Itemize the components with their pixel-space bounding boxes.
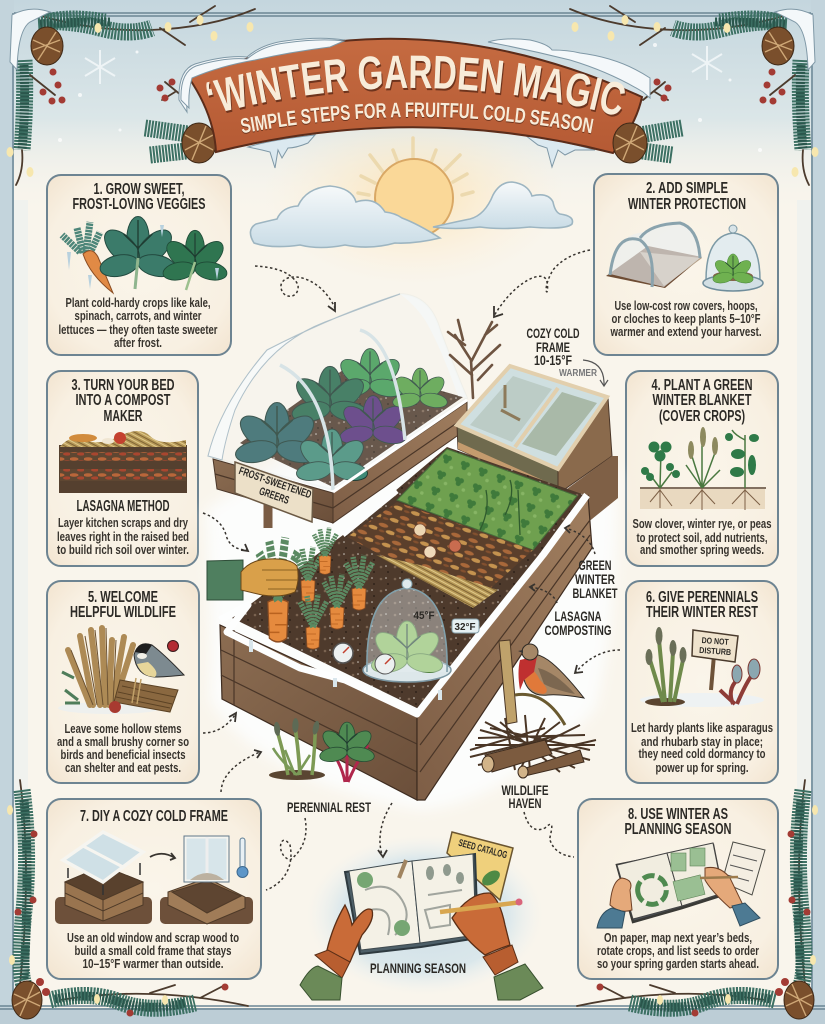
panel 7: cold frame	[47, 799, 261, 979]
icon: lasagna layers	[59, 431, 187, 493]
label: green winter blanket	[572, 557, 618, 601]
body 3: leaves right in the raised bed	[57, 530, 189, 544]
body 8: so your spring garden starts ahead.	[597, 957, 759, 971]
garland: top left corner	[6, 6, 255, 185]
body 3: to build rich soil over winter.	[57, 543, 189, 557]
planning vignette	[300, 832, 543, 1000]
label: lasagna composting: LASAGNA	[554, 608, 602, 624]
heading 4: WINTER BLANKET	[652, 392, 752, 409]
garland: bottom right corner	[577, 780, 818, 1019]
title text: ‘WINTER GARDEN MAGIC	[206, 56, 626, 117]
icon: clouds	[250, 182, 572, 248]
bird: robin	[515, 644, 584, 725]
icon: asparagus sign rhubarb: DISTURB	[699, 645, 732, 657]
label: cozy cold frame	[526, 325, 597, 379]
icon: soil thermometer	[333, 643, 353, 663]
cold frame	[457, 366, 618, 540]
icon: asparagus sign rhubarb	[640, 627, 764, 707]
heading 6: 6. GIVE PERENNIALS	[646, 589, 758, 606]
arrow: bed to planning	[378, 803, 392, 857]
garland: top right corner	[570, 6, 818, 185]
icon: carrot kale spinach	[62, 216, 228, 293]
icon: gloved hand pulling carrot	[207, 559, 298, 600]
icon: clover rye pea plants	[640, 427, 766, 510]
banner decoration: right pine and cone	[635, 78, 682, 155]
label: wildlife haven	[502, 782, 548, 811]
panel 4: cover crops	[626, 371, 778, 566]
row cover and hoops	[208, 294, 467, 490]
icon: sun	[358, 138, 473, 237]
icon: soil patches	[55, 897, 253, 924]
heading 2: 2. ADD SIMPLE	[646, 180, 728, 197]
body 4: Sow clover, winter rye, or peas	[632, 517, 772, 531]
panel 8: planning	[578, 799, 778, 979]
body 4: to protect soil, add nutrients,	[636, 531, 768, 545]
label: wildlife haven: WILDLIFE	[502, 782, 548, 798]
body 4: and smother spring weeds.	[640, 543, 764, 557]
arrow: blanket label to bed	[565, 525, 595, 554]
arrow: panel 1 to back bed	[255, 266, 335, 311]
body 5: can shelter and eat pests.	[65, 761, 181, 775]
sign: frost-sweetened greens: GREERS	[257, 485, 291, 507]
heading 8	[624, 806, 732, 838]
body 7: 10–15°F warmer than outside.	[82, 957, 224, 971]
arrow: panel 5 to perennials	[203, 713, 236, 733]
body 7: build a small cold frame that stays	[74, 944, 232, 958]
icon: thermometer	[237, 838, 248, 878]
sign: frost-sweetened greens	[235, 462, 313, 528]
heading 7: 7. DIY A COZY COLD FRAME	[80, 808, 228, 825]
body 2	[610, 299, 762, 339]
heading 2: WINTER PROTECTION	[628, 196, 746, 213]
arrow: lasagna label to bed	[530, 584, 557, 603]
seed catalog: SEED CATALOG	[457, 838, 508, 861]
main raised bed	[220, 447, 592, 800]
label: lasagna composting	[544, 608, 612, 638]
label: green winter blanket: GREEN	[578, 557, 612, 573]
arrow: frame step	[150, 853, 175, 860]
open book	[345, 854, 478, 954]
body 6: Let hardy plants like asparagus	[631, 721, 773, 735]
body 2: Use low-cost row covers, hoops,	[614, 299, 758, 313]
heading 3: MAKER	[104, 408, 142, 425]
right mitten and sleeve	[440, 893, 543, 1000]
body 3	[57, 516, 189, 557]
label: green winter blanket: BLANKET	[572, 585, 618, 601]
body 2: warmer and extend your harvest.	[610, 325, 762, 339]
heading 5	[70, 589, 176, 621]
heading 5: HELPFUL WILDLIFE	[70, 604, 176, 621]
icon: frame with window lifted	[63, 832, 143, 921]
icon: chard	[319, 722, 375, 782]
body 3: Layer kitchen scraps and dry	[58, 516, 188, 530]
heading 1: FROST-LOVING VEGGIES	[72, 196, 206, 213]
heading 1	[72, 181, 206, 213]
garland: bottom left corner	[7, 780, 248, 1019]
arrow: panel 8 loop	[524, 812, 574, 857]
icon: notepad	[722, 842, 765, 895]
body 1	[58, 296, 218, 350]
label: cozy cold frame: FRAME	[536, 339, 570, 355]
heading 4	[652, 377, 752, 425]
body 1: lettuces — they often taste sweeter	[58, 323, 218, 337]
snow on rim	[220, 495, 587, 714]
body 6	[631, 721, 773, 775]
brush pile and logs	[470, 715, 596, 778]
seed catalog	[447, 832, 513, 900]
body 5: Leave some hollow stems	[64, 722, 182, 736]
subheading: lasagna method: LASAGNA METHOD	[76, 498, 170, 515]
body 5: birds and beneficial insects	[60, 748, 186, 762]
panel 2: winter protection	[594, 174, 778, 355]
body 7	[67, 931, 239, 971]
label: cozy cold frame: WARMER	[559, 367, 597, 379]
body 6: they need cold dormancy to	[638, 747, 766, 761]
icon: glass cloche	[703, 225, 763, 291]
panel 1: grow sweet veggies	[47, 175, 231, 355]
heading 5: 5. WELCOME	[88, 589, 158, 606]
icon: row cover tunnel	[606, 222, 702, 288]
label: cozy cold frame: COZY COLD	[526, 325, 580, 341]
panel 6: perennials	[626, 581, 778, 783]
body 1: after frost.	[114, 336, 162, 350]
sign: frost-sweetened greens: FROST-SWEETENED	[237, 465, 313, 501]
body 6: and rhubarb stay in place;	[641, 735, 763, 749]
icon: snowflake right	[692, 46, 722, 80]
label: cozy cold frame: 10-15°F	[534, 352, 572, 368]
snow ground under garden	[205, 405, 618, 810]
heading 4: (COVER CROPS)	[659, 408, 745, 425]
cloche temperature: 45°F	[414, 610, 435, 622]
plants: kale and greens	[234, 349, 448, 483]
arrow: warmer to cold frame	[583, 360, 608, 386]
left mitten and sleeve	[300, 905, 373, 1000]
heading 3: INTO A COMPOST	[76, 392, 171, 409]
panel 5: wildlife	[47, 581, 199, 783]
icon: chickadee	[134, 640, 184, 677]
heading 6: THEIR WINTER REST	[646, 604, 758, 621]
bare tree	[448, 320, 500, 398]
body 4	[632, 517, 772, 557]
bed walls	[220, 625, 417, 800]
arrow: panel 3 to carrots	[203, 513, 248, 551]
stake and perch	[499, 640, 517, 724]
bed soil and layers	[232, 447, 585, 712]
icon: finished frame	[168, 836, 245, 924]
label: wildlife haven: HAVEN	[508, 795, 542, 811]
label: green winter blanket: WINTER	[575, 571, 615, 587]
heading 4: 4. PLANT A GREEN	[652, 377, 752, 394]
subtitle text: SIMPLE STEPS FOR A FRUITFUL COLD SEASON	[240, 102, 594, 134]
arrow: panel 7 loop	[266, 818, 306, 890]
icon: planner book	[617, 843, 723, 922]
heading 6	[646, 589, 758, 621]
cloche with lettuce	[363, 579, 451, 682]
icon: snowflake left	[85, 50, 115, 84]
body 1: Plant cold-hardy crops like kale,	[66, 296, 210, 310]
label: lasagna composting: COMPOSTING	[544, 622, 612, 638]
arrow: panel 7 to perennials	[221, 750, 261, 792]
label: perennial rest: PERENNIAL REST	[287, 799, 371, 815]
icon: asparagus	[269, 718, 325, 780]
body 5: and a small brushy corner so	[57, 735, 189, 749]
body 7: Use an old window and scrap wood to	[67, 931, 239, 945]
heading 8: PLANNING SEASON	[624, 821, 732, 838]
body 5	[57, 722, 189, 775]
arrow: panel 6 to bird	[575, 650, 620, 673]
body 8: rotate crops, and list seeds to order	[597, 944, 759, 958]
body 8: On paper, map next year’s beds,	[604, 931, 752, 945]
icon: hands writing	[597, 867, 760, 928]
heading 2	[628, 180, 746, 213]
banner decoration: left pine and cone	[145, 78, 216, 163]
heading 8: 8. USE WINTER AS	[628, 806, 728, 823]
heading 1: 1. GROW SWEET,	[94, 181, 184, 198]
icon: hollow stems bundle	[58, 628, 178, 714]
icon: asparagus sign rhubarb: DO NOT	[701, 635, 730, 647]
body 1: spinach, carrots, and winter	[74, 309, 202, 323]
carrots	[259, 528, 373, 649]
body 8	[597, 931, 759, 971]
label: planning season: PLANNING SEASON	[370, 960, 466, 976]
back raised bed with row cover	[208, 294, 467, 523]
heading 3: 3. TURN YOUR BED	[72, 377, 174, 394]
heading 3	[72, 377, 174, 425]
arrow: panel 2 to cold frame	[494, 250, 590, 317]
tag: 32F: 32°F	[454, 621, 476, 633]
banner: title ribbon	[178, 38, 650, 169]
panel 3: compost	[47, 371, 198, 566]
body 6: power up for spring.	[656, 761, 748, 775]
body 2: or cloches to keep plants 5–10°F	[612, 312, 761, 326]
